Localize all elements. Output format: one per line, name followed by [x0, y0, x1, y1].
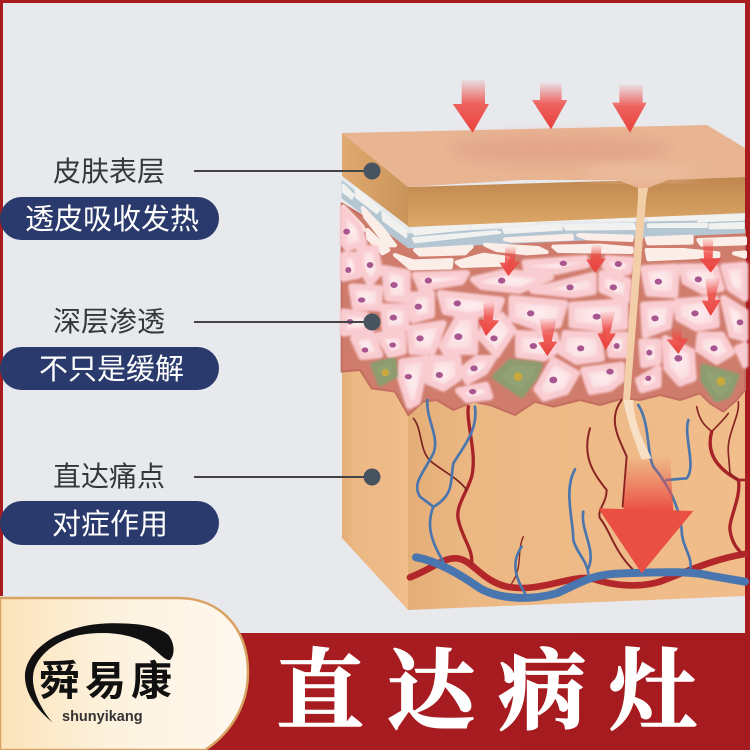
pill: more than relief: 不只是缓解: [39, 353, 184, 386]
cell nuclei: [343, 229, 743, 394]
upper brown band and left side: [342, 133, 745, 227]
label: reach pain point: 直达痛点: [53, 461, 165, 492]
main blue vein: [416, 557, 745, 598]
top arrow 1: [453, 80, 489, 133]
pill: targeted action: [0, 501, 219, 545]
label: skin surface: [53, 156, 380, 187]
bottom red banner: [0, 633, 750, 750]
label: skin surface: 皮肤表层: [53, 156, 165, 187]
logo pinyin: shunyikang: [62, 709, 143, 725]
top red arrows: [453, 80, 647, 133]
white stratum corneum layer: [342, 180, 745, 248]
arrow: [702, 278, 721, 316]
blood vessels: [410, 400, 745, 598]
blue branches: [417, 400, 691, 593]
logo panel: [0, 598, 248, 750]
top skin surface: [342, 125, 745, 188]
logo name: 舜易康: [39, 658, 177, 704]
logo: [25, 623, 177, 725]
epidermis base layer with wavy bottom: [342, 180, 745, 415]
top arrow 3: [612, 85, 647, 133]
arrow: [586, 245, 606, 273]
label: deep penetration: [53, 306, 380, 337]
label: deep penetration: 深层渗透: [53, 306, 165, 337]
label: reach pain point: [53, 461, 380, 492]
top arrow 2: [532, 83, 567, 129]
pink epidermal cells: [343, 208, 745, 406]
pill: targeted action: 对症作用: [52, 508, 168, 541]
logo brush stroke: [25, 623, 174, 723]
arrow: [499, 247, 520, 276]
arrow: [538, 318, 557, 356]
arrow: [667, 327, 688, 354]
arrow: [478, 302, 499, 336]
arrow: [699, 238, 722, 273]
arrow: [597, 312, 616, 350]
small red arrows in cells: [478, 238, 722, 356]
pigment cell nuclei: [382, 369, 725, 386]
large red arrow: [598, 400, 693, 573]
white flat cells: [343, 207, 745, 268]
red branches: [413, 400, 745, 583]
pill: transdermal heat: 透皮吸收发热: [25, 203, 199, 236]
pill: transdermal heat: [0, 197, 219, 240]
skin block diagram: [342, 80, 745, 610]
lower dermis block: [342, 340, 745, 610]
hair shaft: [623, 188, 648, 400]
banner title: 直达病灶: [276, 645, 720, 742]
green pigment cells: [373, 360, 737, 400]
main red artery: [410, 554, 745, 588]
pill: more than relief: [0, 347, 219, 390]
